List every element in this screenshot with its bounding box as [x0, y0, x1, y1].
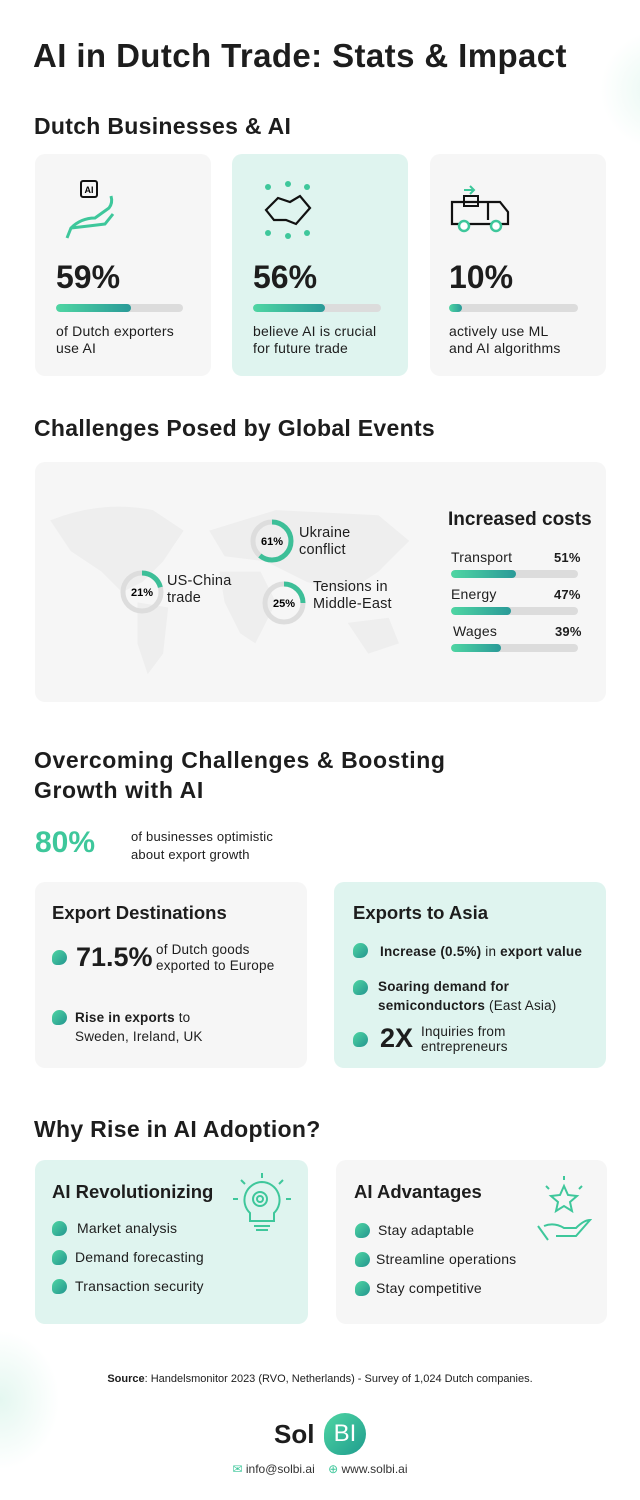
card: Export Destinations: Export Destinations — [52, 902, 227, 923]
card: Export Destinations: Rise in exports to — [75, 1010, 190, 1025]
card: 10%: and AI algorithms — [449, 340, 561, 356]
heading: Challenges: Challenges Posed by Global Events — [34, 415, 435, 441]
increased costs: Wages — [453, 623, 497, 639]
donut: Ukraine 61%: conflict — [299, 542, 346, 558]
card: Export Destinations: of Dutch goods — [156, 942, 250, 957]
world map (simplified) — [40, 487, 440, 687]
increased costs: 51% — [554, 550, 581, 565]
donut: Middle-East 25%: Middle-East — [313, 596, 392, 612]
donut: Middle-East 25% — [262, 579, 392, 624]
heading: Overcoming — [34, 747, 446, 803]
stat: 80%: about export growth — [131, 847, 250, 862]
card: Exports to Asia: Exports to Asia — [353, 902, 488, 923]
card: Exports to Asia: 2X — [380, 1023, 413, 1053]
card: AI Advantages: Streamline operations — [376, 1251, 516, 1267]
contacts: ✉ info@solbi.ai ⊕ www.solbi.ai — [232, 1462, 408, 1476]
card: AI Revolutionizing: Market analysis — [77, 1220, 177, 1236]
card: Exports to Asia: Soaring demand for — [378, 979, 509, 994]
card: 59%: of Dutch exporters — [56, 323, 174, 339]
increased costs: Energy — [451, 586, 497, 602]
decorative blobs — [600, 30, 640, 150]
donut: Ukraine 61%: Ukraine — [299, 525, 350, 541]
card: AI Advantages — [336, 1160, 607, 1324]
card: AI Advantages: Stay competitive — [376, 1280, 482, 1296]
card: Exports to Asia: Inquiries from — [421, 1024, 506, 1039]
card: Export Destinations: exported to Europe — [156, 958, 274, 973]
card: AI Advantages: AI Advantages — [354, 1181, 482, 1202]
logo: BI — [334, 1420, 356, 1447]
heading: Overcoming: Overcoming Challenges & Boosting — [34, 747, 446, 773]
icon: AI hand: AI — [84, 185, 94, 195]
donut: US-China 21%: 21% — [131, 587, 153, 599]
donut: Ukraine 61%: 61% — [261, 536, 283, 548]
icon: AI hand — [66, 180, 114, 238]
card: Exports to Asia: semiconductors (East Asia) — [378, 998, 557, 1013]
card: AI Revolutionizing — [35, 1160, 308, 1324]
donut: US-China 21% — [120, 570, 232, 614]
stat: 80% — [35, 826, 273, 862]
logo: Sol — [274, 1419, 314, 1449]
card: AI Revolutionizing: AI Revolutionizing — [52, 1181, 213, 1202]
card: Export Destinations — [35, 882, 307, 1068]
card: 10%: 10% — [449, 259, 513, 295]
stat: 59% — [56, 259, 120, 295]
card: 56%: 56% — [253, 259, 317, 295]
title: AI in Dutch Trade: Stats & Impact — [33, 37, 567, 74]
card: Exports to Asia — [334, 882, 606, 1068]
card: AI Advantages: Stay adaptable — [378, 1222, 474, 1238]
card: 56% — [232, 154, 408, 376]
donut: US-China 21%: trade — [167, 590, 201, 606]
icon: handshake — [264, 181, 312, 239]
card: Export Destinations: 71.5% — [76, 942, 153, 972]
stat: 80%: 80% — [35, 826, 95, 859]
stat: 80%: of businesses optimistic — [131, 829, 273, 844]
card: Exports to Asia: Increase (0.5%) in export value — [380, 944, 582, 959]
icon: truck — [450, 185, 510, 232]
card: 59%: use AI — [56, 340, 96, 356]
card: 10%: actively use ML — [449, 323, 548, 339]
card: 56%: believe AI is crucial — [253, 323, 376, 339]
icon: star hand — [537, 1176, 592, 1241]
card: Export Destinations: Sweden, Ireland, UK — [75, 1029, 203, 1044]
card: 59% — [35, 154, 211, 376]
card: AI Revolutionizing: Demand forecasting — [75, 1249, 204, 1265]
increased costs: 47% — [554, 587, 581, 602]
heading: Dutch Businesses & AI: Dutch Businesses & AI — [34, 113, 291, 139]
heading: Why Rise: Why Rise in AI Adoption? — [34, 1116, 321, 1142]
donut: Middle-East 25%: Tensions in — [313, 579, 388, 595]
card: 10% — [430, 154, 606, 376]
increased costs: Increased costs — [448, 509, 592, 530]
icon: lightbulb gear — [233, 1173, 291, 1231]
increased costs: 39% — [555, 624, 582, 639]
donut: US-China 21%: US-China — [167, 573, 231, 589]
increased costs — [448, 509, 592, 652]
card: 56%: for future trade — [253, 340, 348, 356]
heading: Overcoming: Growth with AI — [34, 777, 204, 803]
donut: Middle-East 25%: 25% — [273, 598, 295, 610]
card: Exports to Asia: entrepreneurs — [421, 1039, 508, 1054]
increased costs: Transport — [451, 549, 512, 565]
source: Source: Handelsmonitor 2023 (RVO, Netherlands) - Survey of 1,024 Dutch companies. — [107, 1373, 533, 1385]
donut: Ukraine 61% — [250, 520, 350, 562]
card: AI Revolutionizing: Transaction security — [75, 1278, 204, 1294]
logo — [274, 1413, 366, 1455]
panel: global events — [35, 462, 606, 702]
